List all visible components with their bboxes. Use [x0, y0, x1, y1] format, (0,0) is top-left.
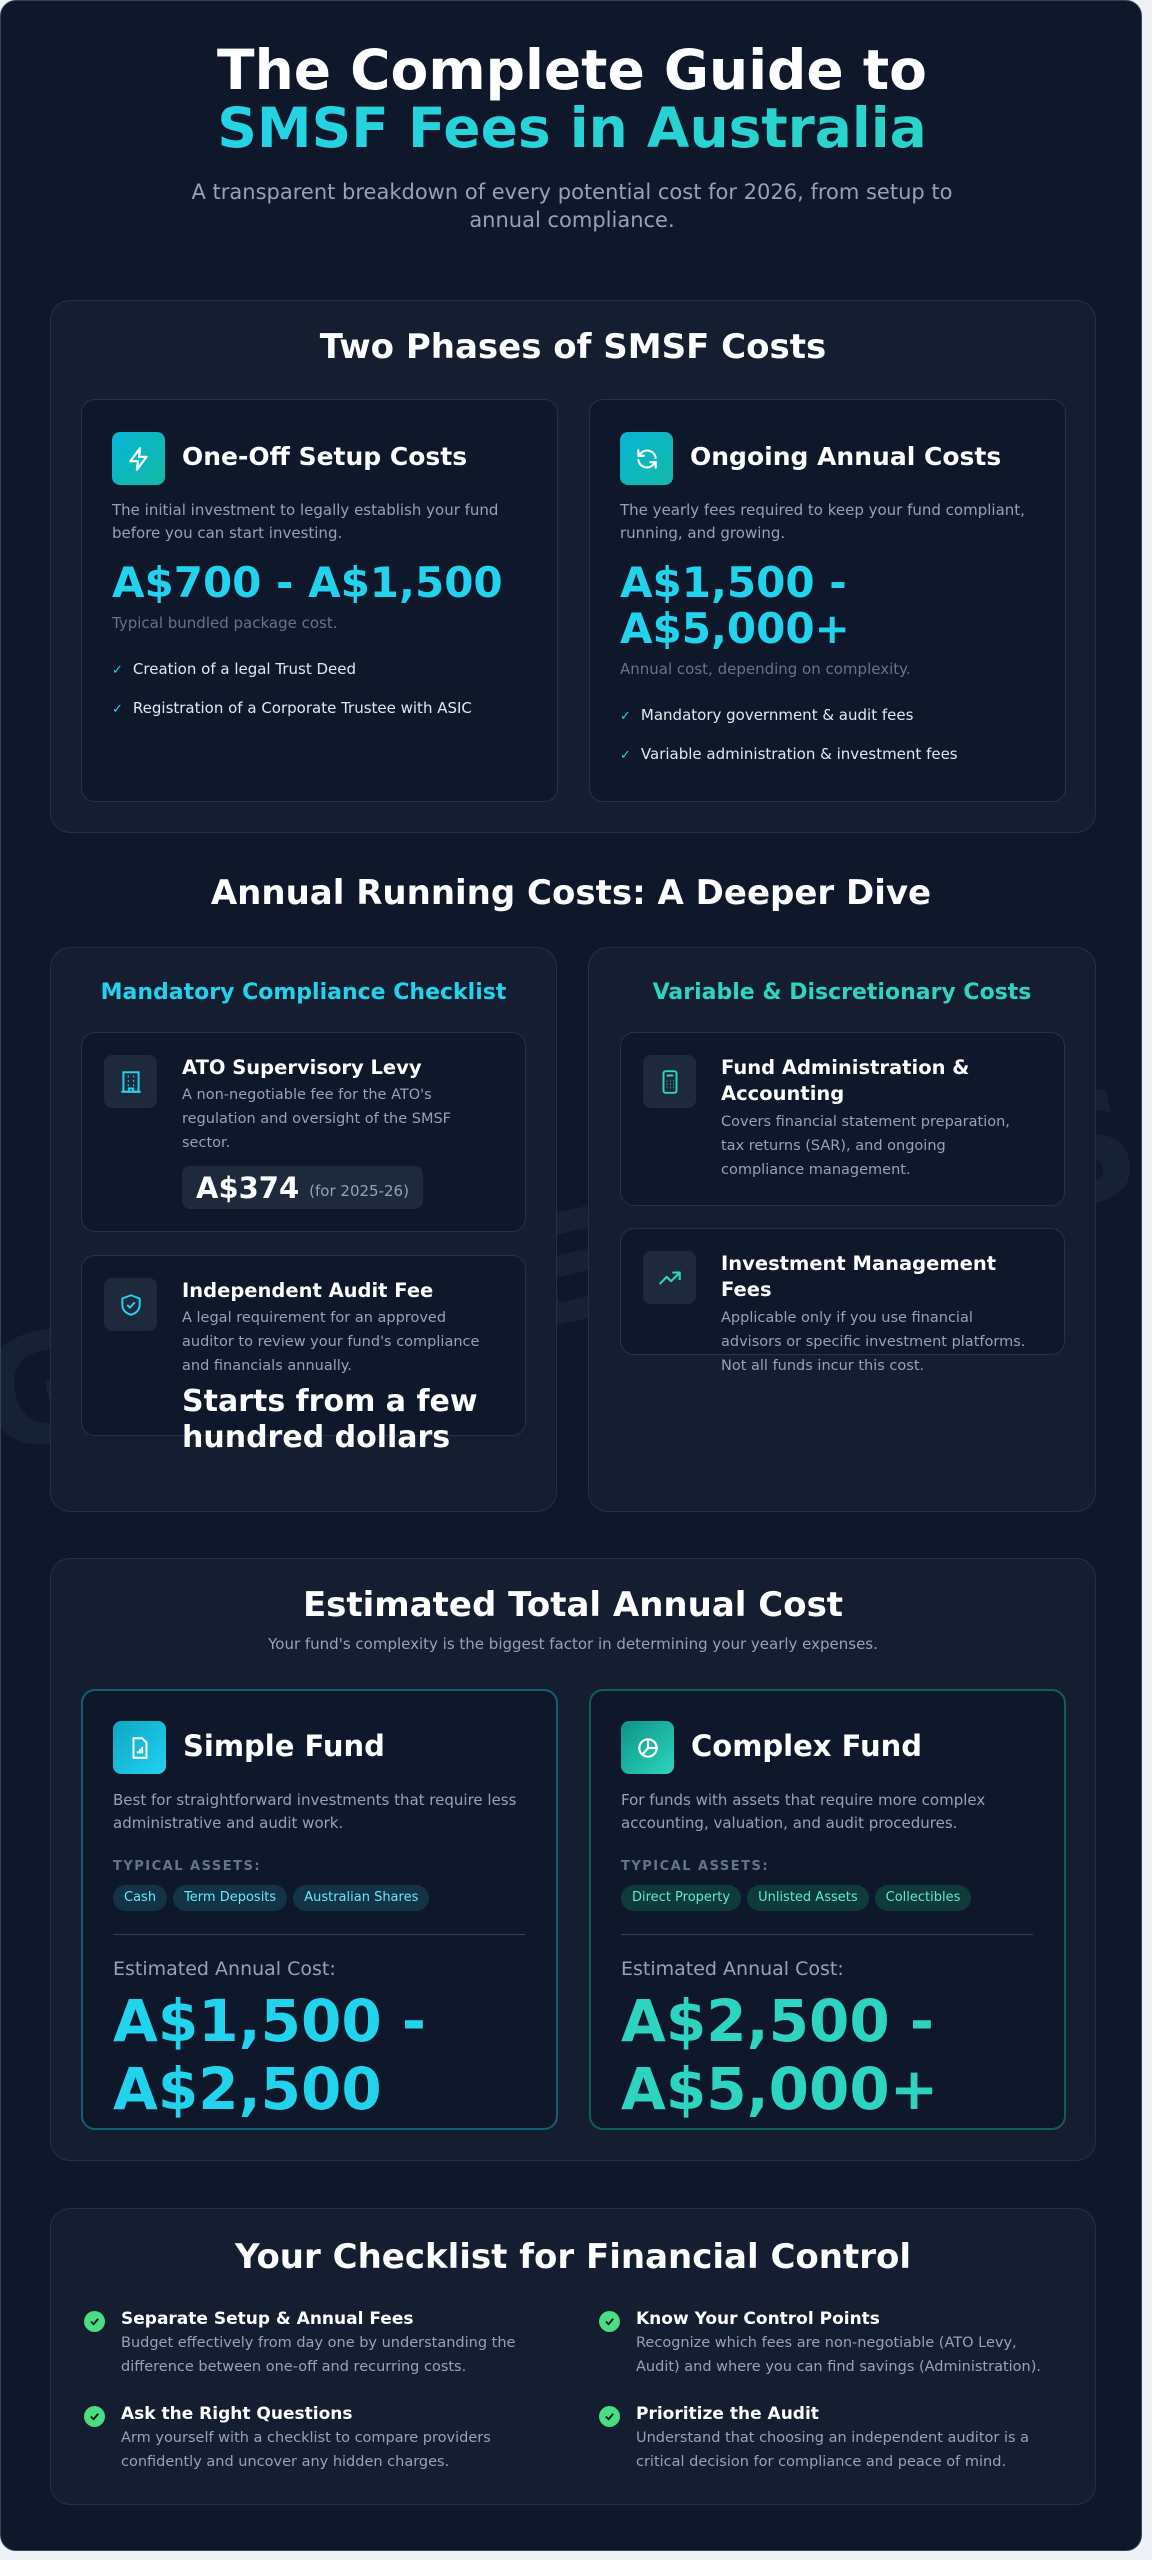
- icon: refresh: [620, 432, 673, 485]
- card: admin: [620, 1032, 1065, 1206]
- card: complex fund: Estimated Annual Cost:: [621, 1958, 844, 1980]
- card: investment: [620, 1228, 1065, 1355]
- item 3: [84, 2404, 491, 2470]
- card: audit: [81, 1255, 526, 1436]
- note: Typical bundled package cost.: [112, 614, 338, 632]
- item 2: [599, 2309, 1041, 2375]
- price: [621, 1987, 938, 2123]
- subtitle: A transparent breakdown of every potential cost for 2026, from setup to annual compliance.: [192, 180, 952, 232]
- item 2: Recognize which fees are non-negotiable (ATO Levy,: [636, 2335, 1017, 2351]
- price: A$5,000+: [621, 2055, 938, 2123]
- price badge: (for 2025-26): [309, 1182, 409, 1200]
- card: ongoing: [589, 399, 1066, 802]
- card title: Ongoing Annual Costs: [690, 442, 1001, 471]
- price: A$700 - A$1,500: [112, 558, 503, 607]
- panel: checklist: [50, 2208, 1096, 2505]
- item 1: [84, 2309, 515, 2375]
- item 4: [599, 2404, 1029, 2470]
- card: complex fund: For funds with assets that require more complex accounting, valuation, and audit procedures.: [621, 1791, 985, 1832]
- item 4: Understand that choosing an independent auditor is a critical decision for compliance and peace of mind.: [636, 2430, 1029, 2470]
- card: setup: [81, 399, 558, 802]
- price badge: [182, 1166, 423, 1209]
- price: A$1,500 -: [620, 558, 847, 607]
- panel: mandatory: [50, 947, 557, 1512]
- price: A$5,000+: [620, 604, 850, 653]
- panel: two phases: [50, 300, 1096, 833]
- card: ATO levy: A non-negotiable fee for the ATO's regulation and oversight of the SMSF sector.: [182, 1087, 451, 1151]
- bullets: ✓ Mandatory government & audit fees: [620, 706, 913, 724]
- chips: Cash: [124, 1890, 156, 1905]
- card: ATO levy: ATO Supervisory Levy: [182, 1056, 422, 1079]
- card: complex fund: TYPICAL ASSETS:: [621, 1859, 769, 1874]
- chips: Collectibles: [886, 1890, 960, 1905]
- card: simple fund: Simple Fund: [183, 1729, 385, 1763]
- panel heading: Mandatory Compliance Checklist: [101, 980, 506, 1005]
- card: admin: Covers financial statement preparation,: [721, 1114, 1010, 1130]
- card: setup: ✓ Registration of a Corporate Trustee with ASIC: [112, 699, 472, 717]
- panel: variable: [588, 947, 1096, 1512]
- icon: trend: [643, 1251, 696, 1304]
- card: simple fund: Estimated Annual Cost:: [113, 1958, 336, 1980]
- card: audit: A legal requirement for an approved auditor to review your fund's compliance and financials annually.: [182, 1310, 479, 1374]
- card: admin: tax returns (SAR), and ongoing: [721, 1138, 946, 1154]
- item 2: Know Your Control Points: [636, 2309, 880, 2329]
- card: investment: Applicable only if you use financial: [721, 1310, 973, 1326]
- price: A$1,500 -: [113, 1987, 426, 2055]
- price: [620, 558, 850, 653]
- card: admin: compliance management.: [721, 1162, 911, 1178]
- heading: Two Phases of SMSF Costs: [320, 327, 826, 367]
- heading: Estimated Total Annual Cost: [303, 1585, 843, 1625]
- title: The Complete Guide to: [217, 38, 927, 102]
- panel: estimated total: [50, 1558, 1096, 2161]
- bullets: ✓ Creation of a legal Trust Deed: [112, 660, 356, 678]
- icon: calculator: [643, 1055, 696, 1108]
- title: [217, 38, 927, 160]
- desc: The yearly fees required to keep your fund compliant, running, and growing.: [620, 501, 1025, 542]
- chips: [113, 1885, 429, 1911]
- price badge: A$374: [196, 1170, 299, 1204]
- chips: Unlisted Assets: [758, 1890, 858, 1905]
- title: SMSF Fees in Australia: [217, 96, 927, 160]
- icon: document chart: [113, 1721, 166, 1774]
- card: investment: advisors or specific investment platforms.: [721, 1334, 1025, 1350]
- heading: Your Checklist for Financial Control: [235, 2237, 911, 2277]
- card: complex fund: Complex Fund: [691, 1729, 922, 1763]
- price: A$2,500 -: [621, 1987, 934, 2055]
- item 4: Prioritize the Audit: [636, 2404, 819, 2424]
- chips: [621, 1885, 971, 1911]
- icon: pie: [621, 1721, 674, 1774]
- item 3: Arm yourself with a checklist to compare providers confidently and uncover any hidden charges.: [121, 2430, 491, 2470]
- card: simple fund: [81, 1689, 558, 2130]
- card: simple fund: Best for straightforward investments that require less administrative and audit work.: [113, 1791, 516, 1832]
- card title: One-Off Setup Costs: [182, 442, 467, 471]
- card: ATO levy: [81, 1032, 526, 1232]
- panel: variable: Not all funds incur this cost.: [721, 1358, 924, 1374]
- chips: Direct Property: [632, 1890, 730, 1905]
- card: complex fund: [589, 1689, 1066, 2130]
- card: admin: Fund Administration & Accounting: [721, 1056, 969, 1105]
- item 1: Budget effectively from day one by understanding the difference between one-off and recurring costs.: [121, 2335, 515, 2375]
- desc: The initial investment to legally establish your fund before you can start investing.: [112, 501, 498, 542]
- panel: mandatory: hundred dollars: [182, 1420, 450, 1455]
- panel heading: Variable & Discretionary Costs: [653, 980, 1031, 1005]
- card: audit: Independent Audit Fee: [182, 1279, 433, 1302]
- chips: Term Deposits: [184, 1890, 276, 1905]
- card: simple fund: TYPICAL ASSETS:: [113, 1859, 261, 1874]
- icon: building: [104, 1055, 157, 1108]
- note: Annual cost, depending on complexity.: [620, 660, 911, 678]
- card: ongoing: ✓ Variable administration & investment fees: [620, 745, 958, 763]
- item 1: Separate Setup & Annual Fees: [121, 2309, 413, 2329]
- icon: shield: [104, 1278, 157, 1331]
- heading: deeper dive: Annual Running Costs: A Deeper Dive: [211, 873, 931, 913]
- subheading: Your fund's complexity is the biggest factor in determining your yearly expenses.: [268, 1635, 878, 1653]
- card: audit: Starts from a few: [182, 1384, 478, 1419]
- card: investment: Investment Management Fees: [721, 1252, 996, 1301]
- price: A$2,500: [113, 2055, 382, 2123]
- item 3: Ask the Right Questions: [121, 2404, 352, 2424]
- icon: lightning: [112, 432, 165, 485]
- price: [113, 1987, 426, 2123]
- chips: Australian Shares: [304, 1890, 418, 1905]
- item 2: Audit) and where you can find savings (Administration).: [636, 2359, 1041, 2375]
